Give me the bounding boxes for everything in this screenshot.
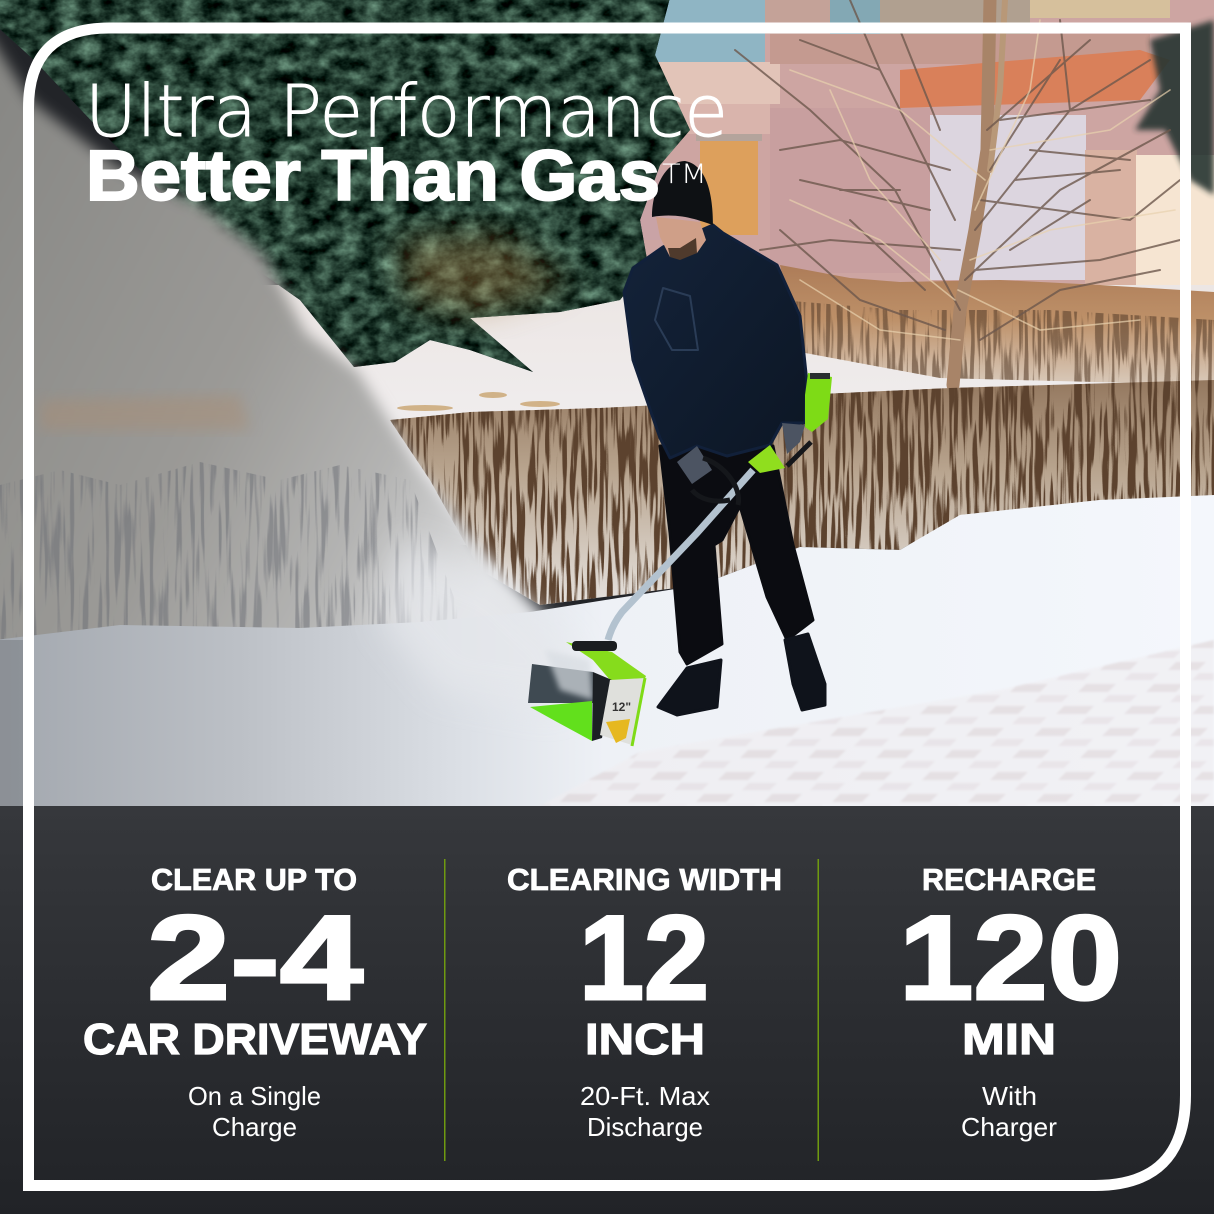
- boots: [658, 634, 825, 715]
- building: [600, 0, 1214, 310]
- dark side strip: [592, 672, 612, 741]
- snow field patches: [397, 392, 560, 411]
- note line 2: Discharge: [587, 1112, 703, 1142]
- spray haze near the shovel: [380, 540, 575, 710]
- column divider 1: [444, 859, 446, 1161]
- bare tree: [735, 0, 1180, 385]
- brick pavement: [540, 640, 1214, 806]
- green top: [566, 642, 646, 690]
- stats panel background: [0, 806, 1214, 1214]
- green edge: [632, 678, 645, 746]
- unit: INCH: [585, 1015, 705, 1064]
- label: RECHARGE: [922, 862, 1096, 897]
- title line 1: Ultra Performance: [85, 70, 728, 153]
- spray over opening: [545, 650, 593, 700]
- number: 12: [579, 891, 709, 1025]
- left strip shade: [0, 640, 24, 806]
- face: [656, 217, 706, 257]
- label: CLEARING WIDTH: [507, 862, 782, 897]
- hat: [652, 161, 713, 225]
- number: 120: [899, 891, 1122, 1025]
- snow shovel: [528, 373, 832, 746]
- trademark: TM: [662, 159, 707, 190]
- black cap: [572, 641, 617, 651]
- back hedge: [780, 265, 1214, 385]
- label: CLEAR UP TO: [151, 862, 357, 897]
- foreground snow: [0, 495, 1214, 806]
- note line 2: Charger: [961, 1112, 1057, 1142]
- column divider 2: [818, 859, 819, 1161]
- man: [624, 161, 825, 715]
- title: [85, 70, 728, 216]
- warning badge: [606, 719, 630, 743]
- note: 20-Ft. Max: [580, 1081, 710, 1111]
- unit: CAR DRIVEWAY: [83, 1015, 427, 1064]
- jacket pocket: [655, 288, 698, 350]
- number: 2-4: [147, 891, 363, 1025]
- front hedge: [390, 380, 1214, 605]
- side plate: [600, 678, 645, 745]
- green drum: [530, 701, 592, 741]
- mid-ground snow: [0, 285, 1214, 545]
- jacket: [624, 225, 807, 458]
- note: On a Single: [188, 1081, 321, 1111]
- spruce tree: [0, 0, 690, 372]
- title line 2: Better Than Gas: [86, 137, 660, 216]
- drum opening: [528, 664, 593, 703]
- size label: 12": [612, 700, 631, 714]
- stat: clearing width 12 inch: [507, 862, 782, 1142]
- note line 2: Charge: [212, 1112, 297, 1142]
- stat: recharge 120 min: [899, 862, 1122, 1142]
- beard: [668, 238, 697, 260]
- stat: clear up to 2-4 car driveway: [83, 862, 427, 1142]
- trousers: [660, 446, 813, 664]
- photo: man clearing snow with electric snow shovel: [0, 0, 1214, 806]
- battery: [805, 373, 832, 432]
- rear handle: [748, 445, 785, 473]
- snow spray plume: [0, 20, 570, 700]
- gloves: [677, 423, 805, 484]
- unit: MIN: [962, 1015, 1056, 1064]
- shaft: [608, 470, 753, 640]
- note: With: [982, 1081, 1037, 1111]
- handle loop: [692, 458, 739, 505]
